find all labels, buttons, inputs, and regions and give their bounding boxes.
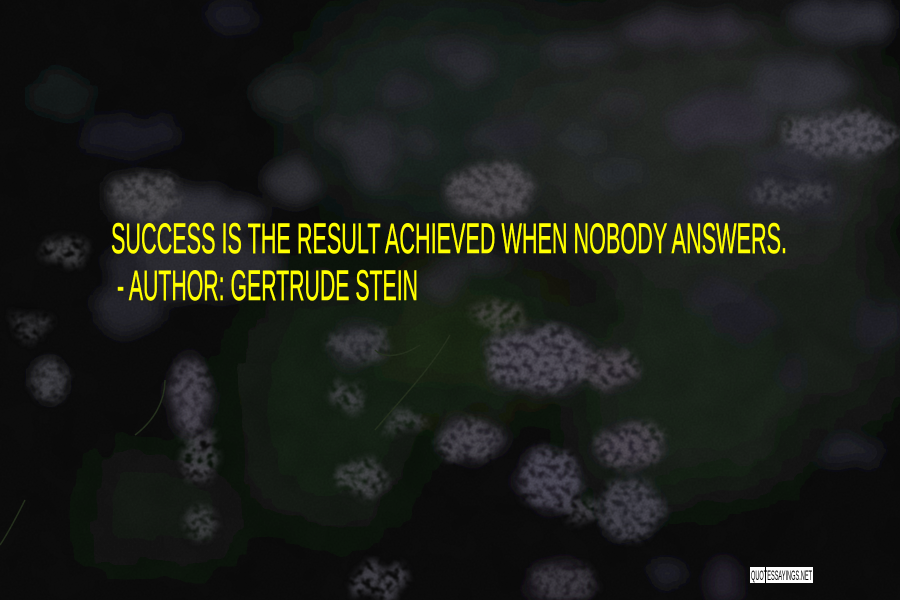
infographic: quote over dark flowers: QUOTESSAYINGS.NET (751, 567, 812, 583)
watermark badge (750, 567, 813, 583)
infographic: quote over dark flowers: - AUTHOR: GERTRUDE STEIN (117, 262, 418, 310)
stems (0, 335, 450, 545)
